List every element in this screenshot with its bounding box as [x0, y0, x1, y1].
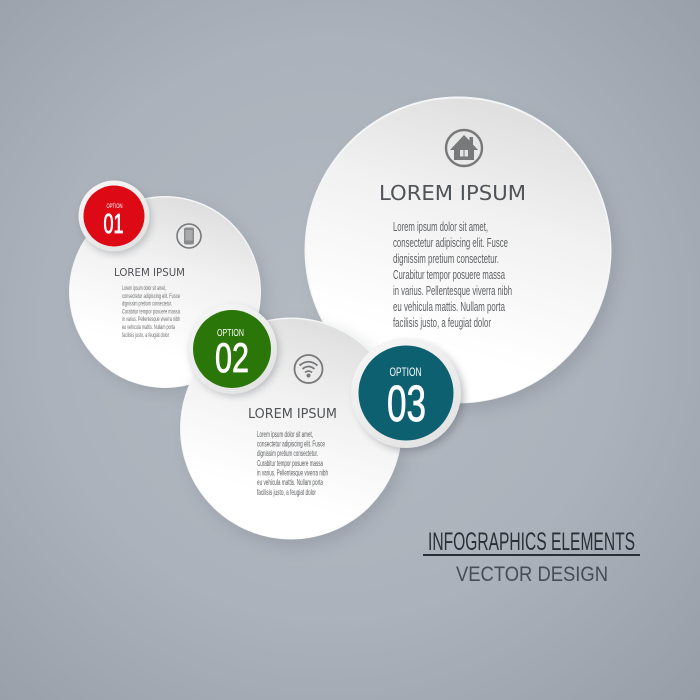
panel: small circle — [69, 196, 264, 392]
text block: medium circle: Lorem ipsum dolor sit amet, — [257, 430, 313, 439]
text block: large circle: Lorem ipsum dolor sit amet, — [393, 219, 488, 234]
text block: medium circle: dignissim pretium consectetur. — [257, 449, 318, 458]
heading: medium circle: LOREM IPSUM — [248, 406, 337, 422]
text block: medium circle: consectetur adipiscing elit. Fusce — [257, 440, 325, 448]
text block: large circle: consectetur adipiscing elit. Fusce — [393, 235, 508, 250]
text block: large circle: dignissim pretium consectetur. — [393, 251, 499, 266]
text block: small circle: eu vehicula mattis. Nullam porta — [122, 325, 175, 331]
text block: small circle: consectetur adipiscing elit. Fusce — [122, 294, 180, 300]
text block: medium circle: facilisis justo, a feugiat dolor — [257, 488, 316, 497]
text block: medium circle — [257, 430, 328, 497]
badge: option 01 — [78, 180, 151, 254]
text block: small circle: facilisis justo, a feugiat dolor — [122, 333, 169, 339]
badge: option 02: OPTION — [217, 328, 244, 339]
text block: small circle: Lorem ipsum dolor sit amet, — [122, 286, 166, 292]
text block: small circle: dignissim pretium consectetur. — [122, 302, 172, 308]
text block: large circle: facilisis justo, a feugiat dolor — [393, 315, 491, 330]
badge: option 01: OPTION — [106, 203, 123, 210]
text block: small circle: in varius. Pellentesque viverra nibh — [122, 317, 180, 323]
heading: small circle: LOREM IPSUM — [114, 267, 185, 279]
badge: option 03 — [351, 338, 464, 451]
badge: option 03: OPTION — [390, 365, 422, 379]
icon: wifi — [294, 355, 322, 383]
text block: small circle — [122, 286, 180, 339]
badge: option 01: 01 — [104, 208, 124, 239]
badge: option 02: 02 — [215, 334, 249, 381]
subtitle: vector design: VECTOR DESIGN — [456, 563, 608, 586]
panel: large circle — [304, 96, 616, 409]
text block: large circle: eu vehicula mattis. Nullam porta — [393, 299, 505, 314]
panel: medium circle — [180, 318, 405, 545]
text block: small circle: Curabitur tempor posuere massa — [122, 310, 180, 316]
icon: phone — [177, 224, 201, 248]
text block: large circle — [393, 219, 512, 330]
icon: house — [446, 130, 482, 166]
heading: large circle: LOREM IPSUM — [379, 181, 526, 205]
text block: medium circle: in varius. Pellentesque viverra nibh — [257, 468, 328, 478]
text block: medium circle: eu vehicula mattis. Nullam porta — [257, 478, 323, 487]
text block: medium circle: Curabitur tempor posuere massa — [257, 459, 323, 468]
badge: option 03: 03 — [387, 375, 426, 432]
badge: option 02 — [187, 304, 279, 396]
text block: large circle: Curabitur tempor posuere massa — [393, 267, 505, 282]
text block: large circle: in varius. Pellentesque viverra nibh — [393, 283, 512, 298]
